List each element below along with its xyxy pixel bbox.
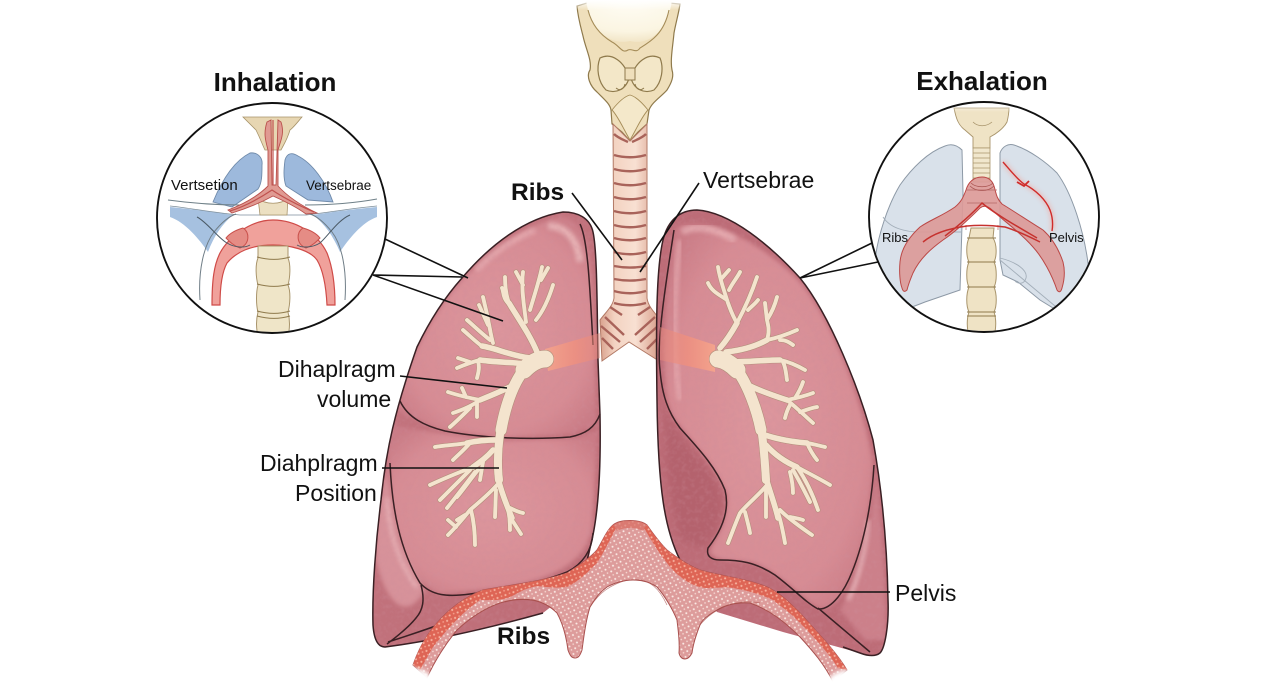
left lung contour lines	[373, 212, 600, 647]
lower blue wings	[170, 207, 233, 252]
upper blue lungs	[213, 153, 262, 207]
label: Ribs top: Ribs	[511, 179, 564, 206]
label: Ribs bottom: Ribs	[497, 623, 550, 650]
red arrow	[1003, 162, 1053, 231]
diaphragm red muscle band	[413, 525, 616, 670]
spine	[967, 228, 996, 332]
label: Diahplragm Position: Diahplragm	[260, 450, 378, 476]
leader lines	[373, 183, 890, 592]
right lung base	[657, 210, 888, 656]
diaphragm right end fade	[824, 666, 860, 694]
grey pleural arcs	[200, 214, 345, 300]
skull base and cranium	[570, 0, 685, 141]
label: Pelvis: Pelvis	[895, 580, 956, 606]
trachea with cartilage rings	[600, 124, 659, 361]
inhalation inset	[157, 103, 387, 336]
inhalation inset label right: Vertsebrae	[306, 178, 371, 193]
spine	[256, 246, 290, 336]
arch overlap right	[298, 228, 320, 248]
heading: Exhalation: Exhalation	[916, 66, 1048, 96]
inhalation inset drawing	[168, 117, 377, 336]
diaphragm	[400, 520, 860, 694]
right bronchial band	[660, 327, 715, 372]
label: Vertsebrae: Vertsebrae	[703, 167, 814, 193]
left bronchial tree	[430, 267, 553, 545]
heading: Inhalation: Inhalation	[214, 67, 336, 97]
exhalation inset label left: Ribs	[882, 230, 909, 245]
exhalation inset	[869, 100, 1099, 332]
left lung	[370, 205, 605, 655]
label: Diahplragm Position: Position	[295, 480, 377, 506]
label: Dihaplragm volume: Dihaplragm	[278, 356, 396, 382]
right lung front lobe	[660, 219, 887, 647]
red diaphragm chevron	[900, 177, 1064, 292]
right lung contour lines	[657, 210, 888, 656]
red diaphragm arch	[212, 220, 335, 305]
neck bone	[954, 108, 1009, 148]
left lung lobes	[376, 214, 599, 620]
left lung base	[373, 212, 600, 647]
exhalation inset label right: Pelvis	[1049, 230, 1084, 245]
exhalation inset drawing	[875, 100, 1088, 332]
label: Dihaplragm volume: volume	[317, 386, 391, 412]
dark red muscle curves	[923, 203, 1040, 242]
diaphragm left end fade	[400, 664, 436, 692]
right bronchial tree	[708, 267, 830, 543]
grey-blue lungs	[875, 145, 963, 313]
inhalation circle border	[157, 103, 387, 333]
trachea	[973, 148, 990, 182]
right lung	[650, 205, 895, 660]
diaphragm pale body	[413, 520, 847, 682]
exhalation circle border	[869, 102, 1099, 332]
red airway	[228, 120, 317, 214]
inhalation inset label left: Vertsetion	[171, 177, 238, 194]
diaphragm cap shading	[613, 520, 647, 531]
left bronchial band	[545, 333, 600, 371]
top vertebra	[243, 117, 302, 150]
arch overlap left	[226, 228, 248, 248]
